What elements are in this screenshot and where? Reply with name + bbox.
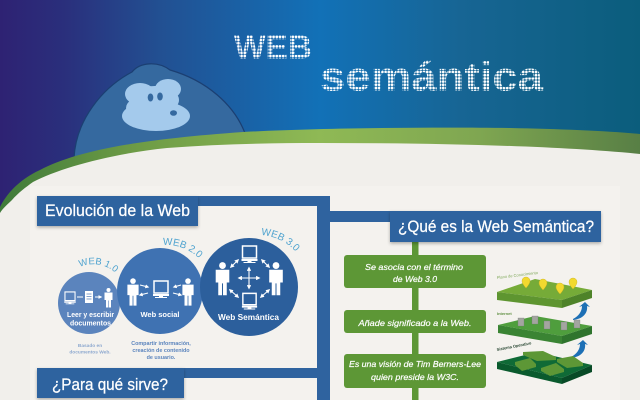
caption: Web 2.0: Compartir información, <box>131 341 191 347</box>
green box: visión: quien preside la W3C. <box>371 372 459 382</box>
green connector <box>412 240 418 400</box>
label: WEB 3.0: WEB 3.0 <box>262 228 300 250</box>
green box: visión: Es una visión de Tim Berners-Lee <box>349 359 481 369</box>
green box: visión <box>344 354 486 388</box>
green box: significado <box>344 310 486 333</box>
green box: asociación <box>344 255 486 288</box>
green swoosh <box>0 128 640 215</box>
mascot dome with face <box>74 64 246 170</box>
caption: Web 2.0 <box>131 341 191 361</box>
text: Web Semántica: Web Semántica <box>218 313 280 322</box>
heading: Qué es la Web Semántica <box>390 211 601 242</box>
circle: Web 3.0 <box>200 228 300 336</box>
blue connector bars <box>180 196 398 400</box>
inner page panel <box>30 186 620 400</box>
arrow: lower <box>571 340 588 358</box>
circle: Web 1.0 <box>58 258 120 334</box>
page background <box>0 143 640 400</box>
caption: Web 2.0: creación de contenido <box>132 348 190 354</box>
green box: asociación: de Web 3.0 <box>393 274 437 284</box>
mascot face <box>122 79 190 131</box>
heading: Evolución de la Web <box>37 196 198 226</box>
heading: Para qué sirve <box>37 368 184 398</box>
caption: Web 1.0: documentos Web. <box>69 350 111 356</box>
caption: Web 1.0 <box>69 343 111 356</box>
icons: people and monitors connected <box>216 246 283 310</box>
label: WEB 2.0: WEB 2.0 <box>163 238 202 258</box>
circle: Web 2.0 <box>117 238 202 334</box>
heading: Para qué sirve: ¿Para qué sirve? <box>52 375 168 394</box>
text: Leer y escribir documentos: documentos <box>70 320 111 328</box>
diagram: semantic layers <box>496 270 592 384</box>
caption: Web 2.0: de usuario. <box>147 355 176 361</box>
title <box>234 28 544 100</box>
text: Leer y escribir documentos: Leer y escribir <box>67 312 114 319</box>
heading: Qué es la Web Semántica: ¿Qué es la Web Semántica? <box>398 217 594 236</box>
text: Leer y escribir documentos <box>67 312 114 328</box>
sky background <box>0 0 640 215</box>
icons: monitor to document to person <box>64 288 112 308</box>
layer: internet: Internet <box>497 311 512 316</box>
layer: operating system: Sistema Operativo <box>496 340 532 352</box>
icons: two people exchanging through a monitor <box>127 278 194 306</box>
green box: significado: Añade significado a la Web. <box>357 318 472 328</box>
caption: Web 1.0: Basado en <box>78 343 102 349</box>
green box: asociación: Se asocia con el término <box>365 262 463 272</box>
layer: knowledge plane: Plano de Conocimiento <box>497 270 539 280</box>
title: semántica <box>320 54 544 100</box>
arrow: upper <box>573 302 590 320</box>
text: Web social: Web social <box>140 310 180 319</box>
heading: Evolución de la Web: Evolución de la Web <box>45 201 190 220</box>
label: WEB 1.0: WEB 1.0 <box>78 258 118 272</box>
title: WEB <box>234 28 312 66</box>
